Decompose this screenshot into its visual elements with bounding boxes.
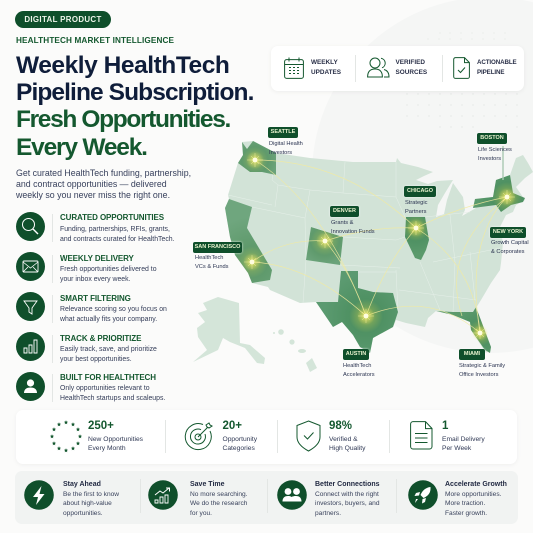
stat: 250+: 250+ [88,420,114,432]
feature: built for healthtech [16,372,165,402]
connection arcs [252,160,507,333]
text: actionable pipeline [477,59,517,76]
kicker: HEALTHTECH MARKET INTELLIGENCE [16,36,174,45]
benefit: better connections: partners. [315,510,341,517]
highlighted: Florida [436,307,491,353]
highlighted: Illinois [405,217,429,260]
stat: 20+ [222,420,257,452]
benefit: better connections: Connect with the right [315,491,379,498]
city label: Seattle: SEATTLE [271,129,295,135]
stat: 1 email: Per Week [442,445,471,452]
text: verified sources [396,59,427,76]
city label: Boston: BOSTON [480,135,504,141]
city label: New York [489,226,529,255]
benefit: better connections [277,480,380,517]
feature: curated opportunities [16,212,175,243]
feature: curated opportunities: CURATED OPPORTUNITIES [60,213,164,222]
highlighted: New York and New England [473,175,525,212]
city label: Chicago [403,185,437,215]
city marker: Chicago [407,219,425,237]
city label: Seattle: Investors [269,150,292,156]
headline: Weekly HealthTech [16,52,229,79]
city marker: Miami [472,325,488,341]
stat: 1 email: 1 [442,420,448,432]
city marker: Austin [357,307,375,325]
Alaska [193,297,265,364]
feature: weekly delivery: Fresh opportunities delivered to [60,266,157,273]
state lines [228,153,500,313]
city label: Miami [459,348,505,378]
city label: Denver: DENVER [333,208,356,214]
feature: curated opportunities: and contracts curated for HealthTech. [60,236,175,243]
icon: shield [296,420,320,452]
intro paragraph: and contract opportunities — delivered [16,179,167,189]
stat: 98%: Verified & [329,436,358,443]
highlighted: Colorado [306,227,343,265]
city label: Boston: Life Sciences [478,147,512,153]
city marker: Boston [498,188,516,206]
text: actionable pipeline: PIPELINE [477,69,504,76]
stat: 98% [329,420,366,452]
feature: built for healthtech: BUILT FOR HEALTHTECH [60,373,156,382]
benefit: save time: We do the research [190,500,247,507]
stat: 20+: Categories [222,445,255,452]
feature: smart filtering: SMART FILTERING [60,294,131,303]
feature: track and prioritize: your best opportunities. [60,356,132,363]
badge: digital product [15,11,111,28]
feature: built for healthtech: HealthTech startups and scaleups. [60,395,165,402]
stat: 98%: High Quality [329,445,365,452]
text: actionable pipeline: ACTIONABLE [477,59,517,66]
city label: Miami: Strategic & Family [459,363,505,369]
city label: Austin [343,348,375,378]
city label: Boston: Investors [478,156,501,162]
stat: 1 email: Email Delivery [442,436,485,443]
text: verified sources: VERIFIED [396,59,425,66]
feature: smart filtering: Relevance scoring so you focus on [60,306,167,313]
badge: digital product: DIGITAL PRODUCT [24,15,102,24]
city label: Austin: HealthTech [343,363,371,369]
city label: New York: Growth Capital [491,240,529,246]
icon: star ring [50,420,82,452]
stat: 20+: Opportunity [222,436,257,443]
stat: 250+: New Opportunities [88,436,143,443]
benefit: accelerate growth: Accelerate Growth [445,480,507,488]
feature: built for healthtech: Only opportunities relevant to [60,385,150,392]
benefit: save time [148,480,248,517]
text: verified sources: SOURCES [396,69,427,76]
stat: 20+: 20+ [222,420,242,432]
feature: smart filtering: what actually fits your company. [60,316,157,323]
benefit: accelerate growth: Faster growth. [445,510,487,517]
city label: Denver [329,205,375,235]
benefit: better connections: Better Connections [315,480,380,488]
icon: document [410,421,432,450]
city label: Chicago: Partners [405,209,426,215]
city marker: Denver [316,232,334,250]
intro paragraph [16,168,191,200]
stat: 250+ [88,420,143,452]
city marker: Seattle [246,151,264,169]
benefit: save time: No more searching. [190,491,248,498]
benefit: accelerate growth: More traction. [445,500,485,507]
feature: track and prioritize: Easily track, save, and prioritize [60,346,157,353]
headline: Fresh Opportunities. [16,106,230,133]
intro paragraph: weekly so you never miss the right one. [16,190,170,200]
stats card [16,410,517,464]
highlighted: Washington [238,141,276,175]
highlighted: California [225,199,272,283]
benefit: better connections: investors, buyers, and [315,500,380,507]
benefit: stay ahead [24,480,119,517]
feature: weekly delivery [16,252,157,283]
Boston spire [502,146,504,180]
icon: target [184,422,213,450]
lower 48 base [225,141,533,353]
city label: Chicago: CHICAGO [407,188,433,194]
city label: San Francisco: VCs & Funds [195,264,229,270]
city label: Miami: MIAMI [464,351,480,357]
feature: weekly delivery: your inbox every week. [60,276,130,283]
intro paragraph: Get curated HealthTech funding, partnership, [16,168,191,178]
benefit: save time: Save Time [190,480,225,488]
city label: Austin: Accelerators [343,372,375,378]
city label: New York: NEW YORK [493,229,523,235]
feature: smart filtering [16,292,167,323]
headline: Pipeline Subscription. [16,79,254,106]
benefit: stay ahead: Stay Ahead [63,480,101,488]
feature list [16,212,175,402]
city label: San Francisco: SAN FRANCISCO [195,244,240,250]
icon: document check [453,57,470,79]
city label: New York: & Corporates [491,249,525,255]
headline: Every Week. [16,134,147,161]
city label: Miami: Office Investors [459,372,498,378]
city label: Boston [477,133,512,162]
city label: Austin: AUSTIN [346,351,366,357]
icon: calendar [284,58,304,79]
benefits strip [15,471,518,524]
highlighted: Texas [316,271,398,353]
benefit: save time: for you. [190,510,212,517]
text: weekly updates [311,59,341,76]
benefit: accelerate growth: More opportunities. [445,491,501,498]
benefit: stay ahead: Be the first to know [63,491,119,498]
feature: weekly delivery: WEEKLY DELIVERY [60,254,134,263]
city label: Denver: Innovation Funds [331,229,375,235]
city label: San Francisco: HealthTech [195,255,223,261]
city marker: San Francisco [243,253,261,271]
stat: 250+: Every Month [88,445,126,452]
benefit: stay ahead: opportunities. [63,510,103,517]
city label: San Francisco [193,240,244,270]
city label: Seattle: Digital Health [269,141,303,147]
feature: track and prioritize [16,332,157,363]
stat: 98%: 98% [329,420,352,432]
city label: Denver: Grants & [331,220,353,226]
Hawaii [273,329,317,372]
city label: Seattle [268,127,303,156]
icon: users [367,58,390,78]
benefit: stay ahead: about high-value [63,500,112,507]
city label: Chicago: Strategic [405,200,427,206]
text: weekly updates: WEEKLY [311,59,338,66]
benefit: accelerate growth [408,480,507,517]
top benefits card [271,46,524,91]
text: weekly updates: UPDATES [311,69,341,76]
feature: curated opportunities: Funding, partnerships, RFIs, grants, [60,226,170,233]
headline [16,52,254,161]
feature: track and prioritize: TRACK & PRIORITIZE [60,334,141,343]
stat: 1 email [442,420,485,452]
